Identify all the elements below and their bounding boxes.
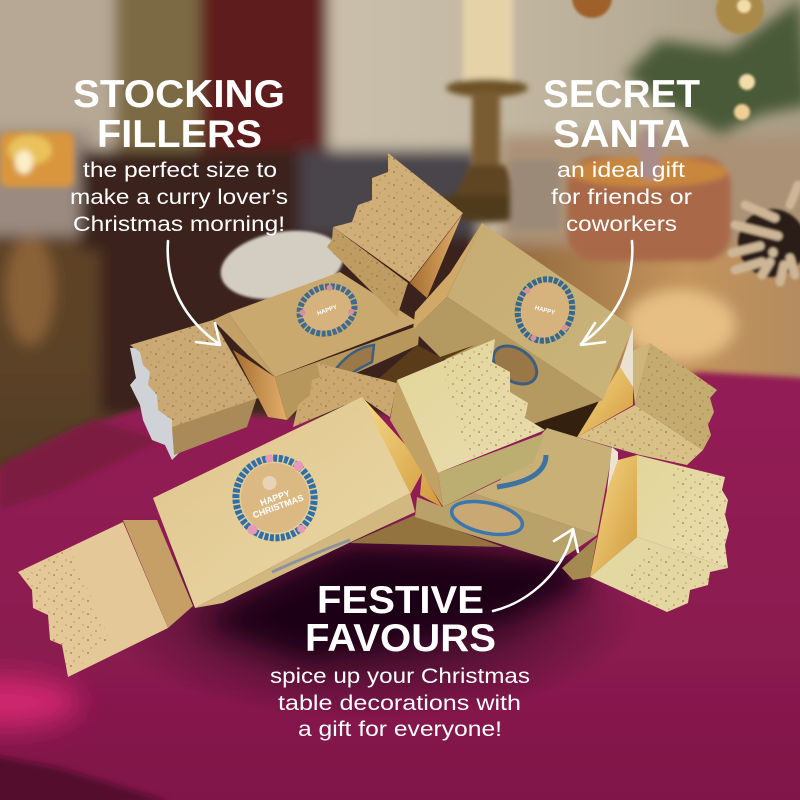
text: festive favours description: spice up your Christmas	[270, 665, 530, 688]
white lining	[620, 327, 633, 387]
gold fold	[590, 455, 637, 577]
left fold	[413, 223, 482, 330]
wreath: partly hidden	[497, 455, 546, 487]
left end top face	[18, 522, 168, 677]
body side face	[415, 493, 597, 562]
text: festive favours description: a gift for everyone!	[298, 718, 502, 741]
body top face	[447, 223, 633, 400]
arrow: to rear left cracker	[168, 241, 220, 345]
background: soft wide shadow	[100, 510, 640, 720]
paper fold	[213, 313, 275, 377]
tan shadow block beneath centre	[350, 515, 503, 547]
heading: secret santa	[543, 73, 700, 156]
text: stocking fillers description: Christmas morning!	[73, 213, 285, 236]
background: white plate	[215, 222, 349, 308]
body top face	[228, 272, 418, 377]
cracker: lower right	[415, 428, 729, 612]
background: tall candle and brass stick	[442, 0, 534, 222]
right end top face	[397, 339, 545, 473]
body top face	[473, 428, 613, 535]
arrow: to lower right cracker	[493, 529, 578, 611]
heading: stocking fillers: STOCKING	[73, 73, 285, 116]
background: orange candle jar	[510, 130, 731, 261]
arrow: to rear right cracker	[581, 241, 632, 345]
right end back	[390, 380, 443, 507]
heading: festive favours: FAVOURS	[305, 617, 496, 660]
right end top face	[635, 343, 717, 450]
right end back fold	[620, 343, 650, 405]
heading: festive favours: FESTIVE	[317, 579, 484, 622]
gold fold	[577, 367, 633, 437]
background: pine cone	[732, 185, 800, 282]
wreath: under side	[332, 345, 374, 378]
text: stocking fillers description: the perfect size to	[83, 159, 277, 182]
dark gap: beneath right end	[530, 400, 603, 437]
left end top face	[130, 320, 258, 427]
wreath: front: HAPPY	[259, 488, 291, 508]
copper fold	[233, 350, 287, 420]
wreath: front: CHRISTMAS	[251, 493, 305, 520]
white lining	[607, 447, 618, 497]
wreath: top right	[510, 273, 579, 349]
text: stocking fillers description	[70, 159, 288, 236]
background: magenta table cloth	[0, 372, 800, 800]
wreath: rear left	[293, 279, 361, 341]
body side face	[275, 325, 420, 420]
rear tail	[293, 363, 397, 427]
body top face	[153, 397, 410, 608]
background: cloth folds at left	[0, 420, 160, 510]
body side face	[195, 493, 415, 608]
heading: festive favours	[305, 579, 496, 660]
text: secret santa description: an ideal gift	[557, 159, 685, 182]
wreath: underside	[272, 540, 350, 572]
wreath: rear left: HAPPY	[317, 305, 338, 317]
background: pink light at lower left	[0, 676, 80, 728]
text: festive favours description	[270, 665, 530, 741]
silver lining	[130, 345, 180, 460]
background: tree, baubles and lights	[572, 0, 800, 135]
text: festive favours description: table decorations with	[278, 692, 521, 715]
background: left candle glow	[0, 132, 74, 187]
text: secret santa description: for friends or	[551, 186, 692, 209]
wreath: front	[224, 444, 326, 551]
heading: secret santa: SECRET	[543, 73, 700, 116]
text: secret santa description	[551, 159, 692, 236]
shadow fold	[562, 537, 597, 580]
end lower face	[590, 537, 728, 612]
right end side face	[577, 405, 703, 465]
heading: secret santa: SANTA	[553, 113, 690, 156]
upright tail top face	[333, 153, 463, 282]
background: cloth edge at lower left	[0, 755, 170, 800]
wreath: top right: HAPPY	[534, 305, 556, 317]
right end side face	[438, 433, 545, 507]
cracker: rear top left	[130, 153, 463, 460]
text: stocking fillers description: make a curry lover’s	[70, 186, 288, 209]
left end side face	[172, 397, 257, 455]
upright tail side face	[327, 227, 408, 317]
heading: stocking fillers: FILLERS	[97, 113, 262, 156]
copper fold	[410, 215, 462, 298]
background: dark shadow below crackers	[200, 545, 588, 660]
cracker: rear top right	[413, 223, 717, 465]
cracker: front large	[18, 339, 545, 677]
heading: stocking fillers	[73, 73, 285, 156]
dark gap between crackers	[377, 345, 475, 382]
body side face	[413, 297, 603, 425]
wreath: side	[449, 496, 525, 540]
gold fold	[362, 397, 442, 507]
wreath: side	[486, 338, 544, 392]
text: secret santa description: coworkers	[566, 213, 677, 236]
end upper face	[637, 455, 729, 568]
left fold	[123, 520, 193, 628]
